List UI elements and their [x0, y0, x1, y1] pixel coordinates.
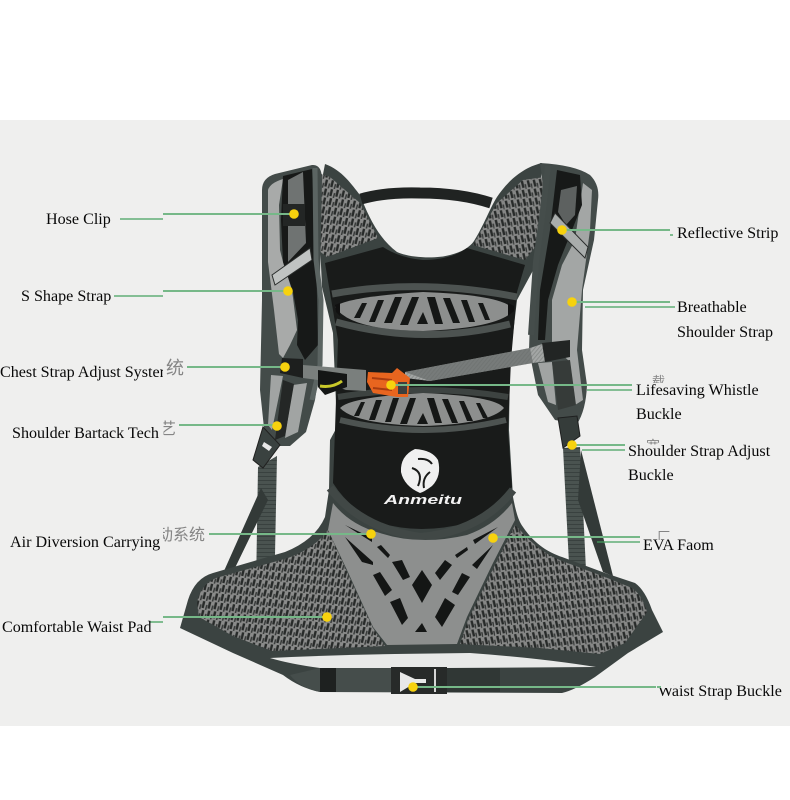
logo: Anmeitu emblem and wordmark: [382, 449, 462, 507]
faded Chinese text remnants: 动系统: [157, 526, 205, 544]
leader lines: [114, 214, 675, 687]
right shoulder strap: [529, 163, 598, 424]
infographic: backpack harness feature diagram: [0, 120, 790, 726]
shoulder mesh: right: [473, 177, 545, 260]
logo: Anmeitu emblem and wordmark: Anmeitu: [382, 492, 462, 507]
harness body silhouette: [180, 163, 663, 693]
faded Chinese text remnants: 匚: [657, 529, 671, 545]
yellow callout dots: [272, 209, 577, 692]
lower back foam panel: [328, 488, 515, 645]
label: Shoulder Strap Adjust Buckle: Buckle: [628, 467, 674, 484]
hose clip: [283, 204, 305, 226]
label: Breathable Shoulder Strap: Shoulder Strap: [677, 324, 773, 341]
waist mesh: left: [197, 530, 385, 651]
label: Waist Strap Buckle: Waist Strap Buckle: [658, 683, 782, 700]
faded Chinese text remnants: 统: [166, 358, 184, 378]
label: Breathable Shoulder Strap: Breathable: [677, 299, 747, 316]
label: S Shape Strap: S Shape Strap: [21, 288, 111, 305]
backpack illustration: [180, 163, 663, 694]
upper lumbar pad: [332, 287, 517, 335]
label: Breathable Shoulder Strap: [677, 299, 773, 341]
left strap buckle: [253, 427, 280, 468]
waist mesh: right: [460, 525, 647, 654]
label: EVA Faom: EVA Faom: [643, 537, 714, 554]
carry handle: [361, 193, 491, 203]
faded Chinese text remnants: [157, 358, 671, 545]
waist belt: [290, 668, 500, 692]
background panel: [0, 120, 790, 726]
black back panel: [325, 247, 525, 529]
label: Shoulder Strap Adjust Buckle: Shoulder Strap Adjust: [628, 443, 771, 460]
shoulder webbing and side straps: [224, 447, 613, 654]
label: Shoulder Strap Adjust Buckle: [628, 443, 771, 484]
shoulder mesh: left: [318, 173, 378, 257]
lower lumbar pad: [338, 390, 508, 430]
label: Lifesaving Whistle Buckle: Lifesaving Whistle: [636, 382, 759, 399]
right chest strap: [405, 340, 570, 381]
right strap buckle: [558, 416, 580, 448]
faded Chinese text remnants: 艺: [160, 420, 176, 438]
faded Chinese text remnants: 宽: [646, 438, 660, 454]
lifesaving whistle buckle: [367, 368, 410, 397]
label: Lifesaving Whistle Buckle: Buckle: [636, 406, 682, 423]
label: Lifesaving Whistle Buckle: [636, 382, 759, 423]
label: Comfortable Waist Pad: Comfortable Waist Pad: [2, 619, 152, 636]
label: Hose Clip: Hose Clip: [46, 211, 111, 228]
right reflective strip: [550, 213, 588, 258]
faded Chinese text remnants: 载: [652, 374, 665, 389]
left reflective strip: [272, 248, 312, 285]
left shoulder strap: [260, 165, 322, 446]
label: Chest Strap Adjust System: Chest Strap Adjust System: [0, 364, 173, 381]
label: Reflective Strip: Reflective Strip: [677, 225, 778, 242]
gap between waist pad and belt: [270, 653, 596, 668]
label: Air Diversion Carrying: Air Diversion Carrying: [10, 534, 160, 551]
waist strap buckle: [391, 667, 447, 694]
label: Shoulder Bartack Tech: Shoulder Bartack Tech: [12, 425, 159, 442]
left chest strap with adjuster: [280, 358, 366, 395]
